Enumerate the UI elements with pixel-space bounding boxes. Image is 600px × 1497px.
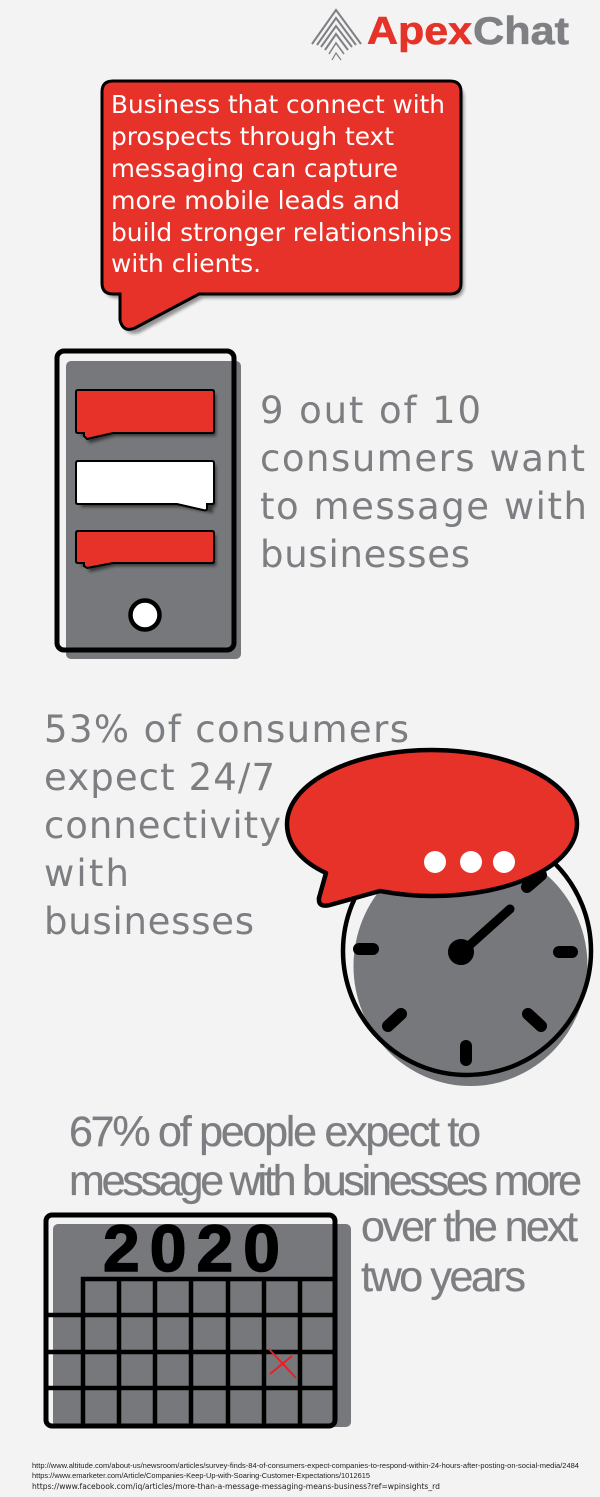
stat: 53% of consumers: businesses (44, 900, 254, 943)
callout: intro speech bubble (102, 81, 464, 334)
phone home button (130, 600, 160, 630)
stat: 9 out of 10: to message with (260, 485, 587, 528)
icon: stacked chevrons (312, 10, 361, 60)
calendar grid (46, 1277, 335, 1425)
clock ticks and hand (359, 875, 572, 1060)
wordmark: Apex (367, 10, 472, 53)
red message 1 (76, 390, 216, 443)
source links: http://www.altitude.com/about-us/newsroom/articles/survey-finds-84-of-consumers-expect-companies-to-respond-within-24-hours-after-posting-on-social-media/2484 (32, 1461, 579, 1470)
stat: 67% of people: message with businesses more (69, 1157, 582, 1205)
red message 2 (76, 531, 216, 572)
clock face (343, 827, 591, 1086)
callout text: more mobile leads and (111, 186, 400, 215)
logo: ApexChat (312, 10, 569, 60)
stat: 9 out of 10 (260, 389, 587, 576)
calendar year: 2020 (103, 1211, 280, 1285)
stat: 53% of consumers (44, 708, 409, 943)
source links: https://www.facebook.com/iq/articles/more-than-a-message-messaging-means-business?ref=wpinsights_rd (32, 1482, 440, 1491)
stat: 9 out of 10: 9 out of 10 (260, 389, 481, 432)
stat: 67% of people: over the next (361, 1203, 578, 1251)
stat: 53% of consumers: expect 24/7 (44, 756, 275, 799)
stat: 9 out of 10: businesses (260, 533, 470, 576)
callout text: messaging can capture (111, 154, 398, 183)
callout text: build stronger relationships (111, 218, 452, 247)
callout text: prospects through text (111, 122, 394, 151)
icon: clock with speech bubble (287, 750, 591, 1086)
red cross mark (269, 1349, 296, 1378)
icon: 2020 calendar (46, 1211, 351, 1427)
red speech bubble (287, 750, 577, 906)
stat: 67% of people: 67% of people expect to (69, 1108, 481, 1156)
source links (32, 1461, 579, 1491)
icon: smartphone with message bubbles (57, 351, 241, 659)
callout text: Business that connect with (111, 90, 445, 119)
stat: 9 out of 10: consumers want (260, 437, 585, 480)
stat: 67% of people (69, 1108, 582, 1301)
callout text: with clients. (111, 249, 261, 278)
white message (76, 461, 216, 513)
stat: 53% of consumers: with (44, 852, 129, 895)
stat: 53% of consumers: 53% of consumers (44, 708, 409, 751)
source links: https://www.emarketer.com/Article/Companies-Keep-Up-with-Soaring-Customer-Expectations/1012615 (32, 1471, 370, 1480)
wordmark: Chat (473, 10, 569, 53)
stat: 67% of people: two years (361, 1253, 526, 1301)
stat: 53% of consumers: connectivity (44, 804, 281, 847)
typing dots (424, 851, 515, 873)
callout text (111, 90, 452, 278)
